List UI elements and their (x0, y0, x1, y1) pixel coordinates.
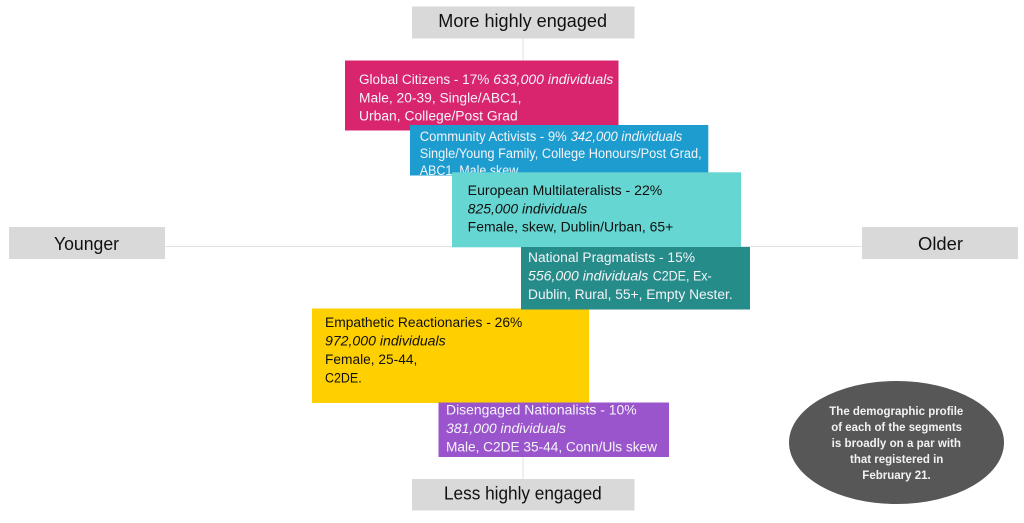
panel: european multilateralists: European Multilateralists - 22% (468, 183, 662, 198)
axis label: less highly engaged (412, 479, 634, 510)
panel: empathetic reactionaries: Female, 25-44, (325, 352, 417, 367)
panel: national pragmatists: Dublin, Rural, 55+, Empty Nester. (528, 287, 733, 302)
panel: empathetic reactionaries (312, 308, 589, 403)
panel: global citizens: 633,000 individuals (493, 72, 614, 87)
panel: disengaged nationalists (438, 402, 669, 457)
callout: demographic profile note: of each of the segments (831, 422, 962, 434)
callout: demographic profile note: February 21. (862, 470, 931, 482)
panel: disengaged nationalists: 381,000 individuals (446, 421, 566, 436)
panel: european multilateralists: Female, skew, Dublin/Urban, 65+ (468, 220, 673, 235)
axis label: more highly engaged: More highly engaged (438, 11, 607, 31)
panel: global citizens: Male, 20-39, Single/ABC1, (359, 90, 522, 105)
panel: european multilateralists: 825,000 individuals (468, 201, 588, 216)
callout: demographic profile note (789, 381, 1004, 504)
panel: global citizens: Urban, College/Post Grad (359, 109, 518, 124)
callout: demographic profile note: The demographic profile (829, 406, 963, 418)
panel: community activists: Single/Young Family, College Honours/Post Grad, (420, 146, 702, 161)
callout: demographic profile note: that registered in (850, 454, 943, 466)
panel: empathetic reactionaries: 972,000 individuals (325, 333, 446, 348)
panel: global citizens (345, 60, 618, 130)
callout: demographic profile note: is broadly on a par with (832, 438, 961, 450)
panel: national pragmatists: National Pragmatists - 15% (528, 250, 695, 265)
panel: national pragmatists: C2DE, Ex- (653, 268, 712, 283)
axis label: younger: Younger (54, 234, 119, 254)
axis label: more highly engaged (412, 6, 634, 38)
panel: community activists (410, 125, 708, 178)
panel: empathetic reactionaries: Empathetic Reactionaries - 26% (325, 315, 522, 330)
panel: empathetic reactionaries: C2DE. (325, 370, 362, 385)
panel: global citizens: Global Citizens - 17% (359, 72, 489, 87)
axis label: older (862, 227, 1018, 259)
panel: disengaged nationalists: Disengaged Nationalists - 10% (446, 403, 637, 418)
panel: national pragmatists: 556,000 individuals (528, 268, 649, 283)
axis label: younger (9, 227, 165, 259)
axis label: less highly engaged: Less highly engaged (444, 484, 602, 504)
axis label: older: Older (918, 234, 963, 254)
panel: european multilateralists (452, 172, 741, 247)
panel: community activists: ABC1, Male skew (420, 163, 519, 178)
panel: national pragmatists (521, 247, 750, 310)
panel: community activists: 342,000 individuals (571, 129, 683, 144)
panel: disengaged nationalists: Male, C2DE 35-44, Conn/Uls skew (446, 440, 657, 455)
panel: community activists: Community Activists - 9% (420, 129, 567, 144)
